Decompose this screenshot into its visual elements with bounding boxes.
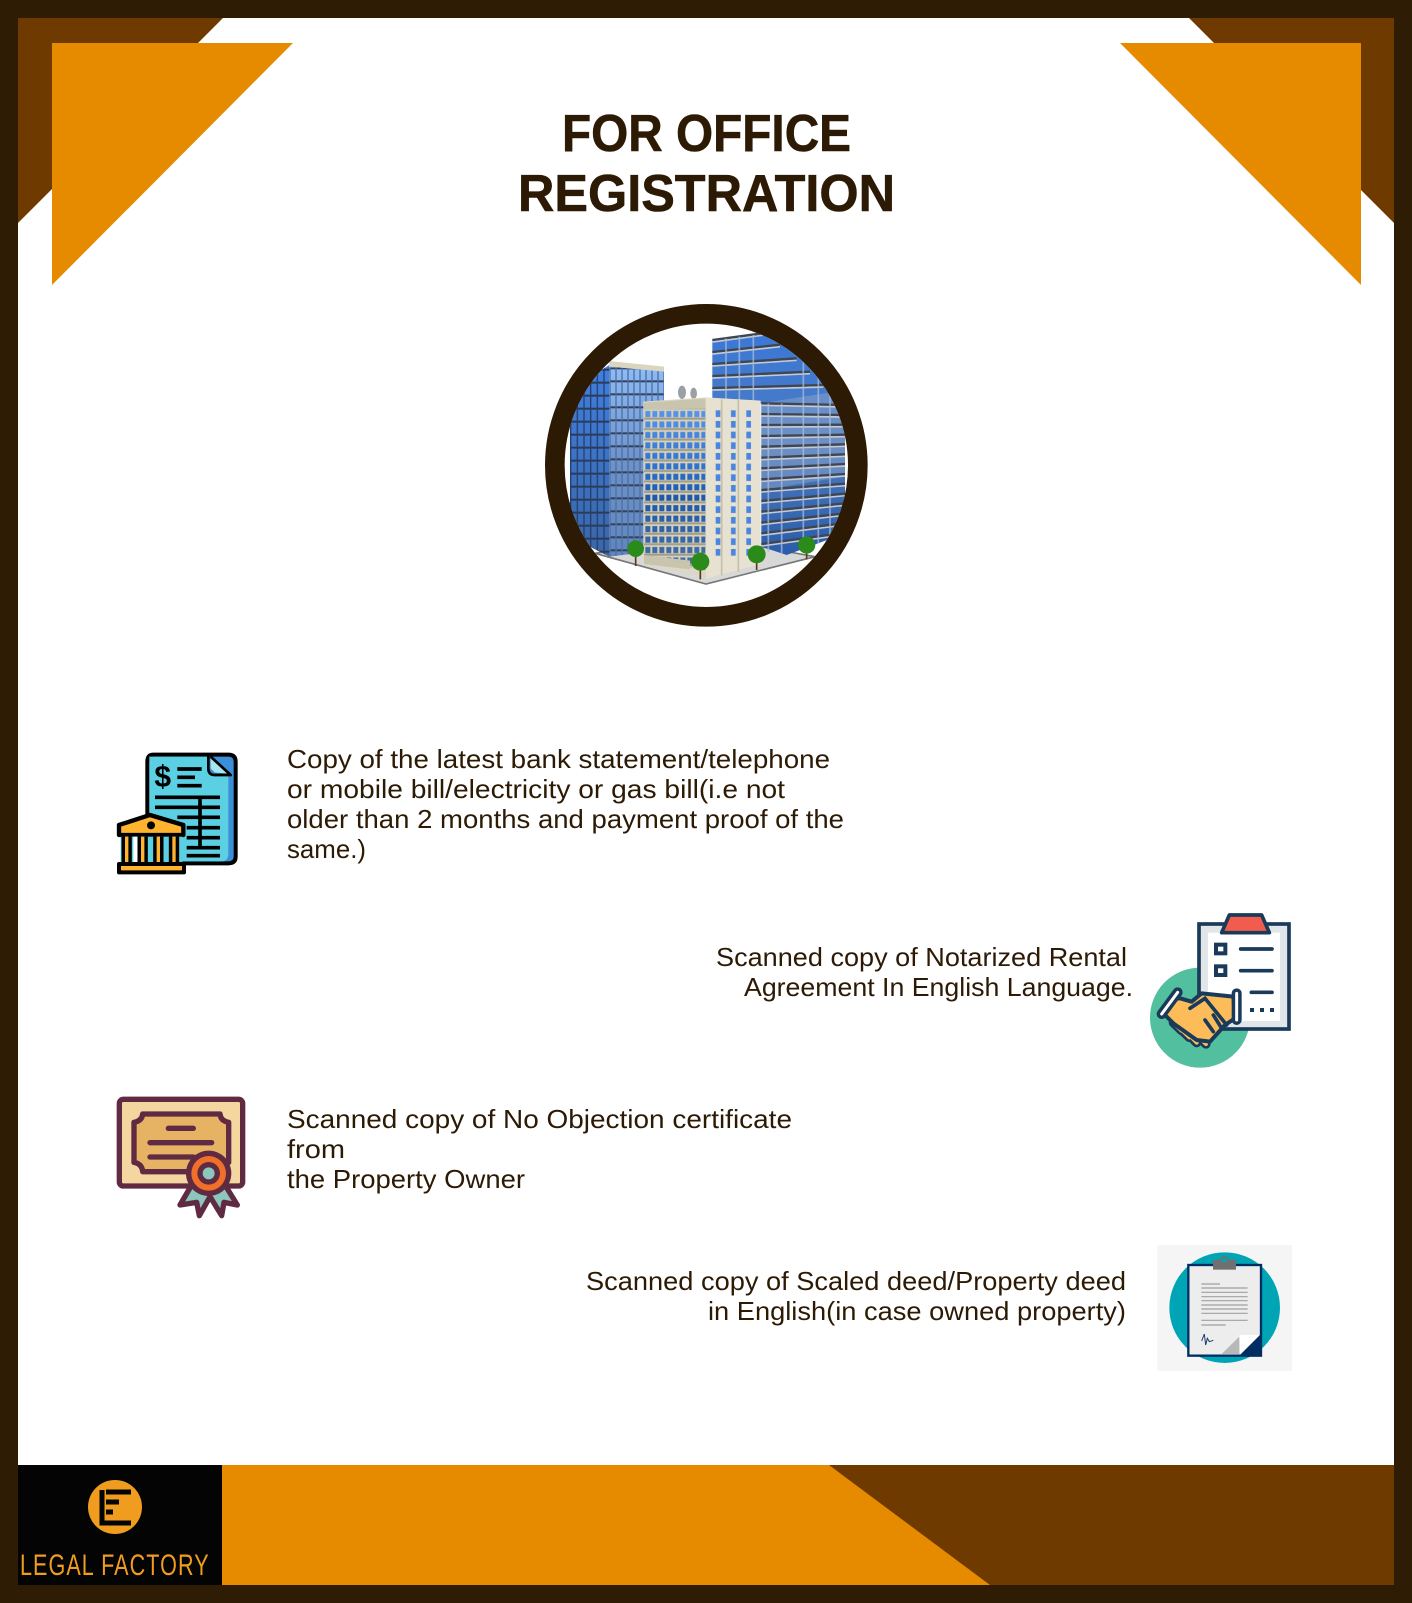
icon: bank document: $	[154, 760, 171, 794]
text: bank statement: same.)	[287, 834, 366, 864]
office buildings badge	[555, 314, 858, 617]
text: no objection certificate: from	[287, 1134, 345, 1164]
title: REGISTRATION	[518, 165, 895, 223]
text: rental agreement: Scanned copy of Notarized Rental	[716, 942, 1127, 972]
text: no objection certificate: Scanned copy of No Objection certificate	[287, 1104, 792, 1134]
trees	[627, 536, 815, 579]
fingers	[1173, 1023, 1206, 1044]
icon: bank document	[119, 755, 236, 872]
item 1: bank statement	[119, 744, 844, 872]
item 4: property deed	[586, 1245, 1292, 1371]
text: rental agreement: Agreement In English Language.	[744, 972, 1133, 1002]
text: rental agreement	[716, 942, 1133, 1002]
icon: handshake checklist	[1150, 915, 1289, 1068]
text: bank statement	[287, 744, 844, 864]
text: no objection certificate	[287, 1104, 792, 1194]
text: no objection certificate: the Property Owner	[287, 1164, 525, 1194]
text: property deed: Scanned copy of Scaled deed/Property deed	[586, 1266, 1126, 1296]
text: bank statement: or mobile bill/electricity or gas bill(i.e not	[287, 774, 786, 804]
center building	[643, 397, 706, 577]
left tower	[570, 365, 609, 557]
back right tower	[712, 333, 845, 555]
item 2: rental agreement	[716, 915, 1289, 1068]
top-left corner decoration	[18, 18, 293, 285]
icon: logo E	[88, 1480, 142, 1534]
logo wordmark: LEGAL FACTORY	[20, 1547, 209, 1582]
text: bank statement: older than 2 months and payment proof of the	[287, 804, 844, 834]
item 3: no objection certificate	[119, 1099, 792, 1216]
text: bank statement: Copy of the latest bank statement/telephone	[287, 744, 830, 774]
dishes	[678, 386, 686, 399]
icon: signed clipboard	[1157, 1245, 1292, 1371]
badge ring	[555, 314, 858, 617]
title	[518, 105, 895, 223]
icon: office towers	[570, 333, 846, 585]
text: property deed	[586, 1266, 1126, 1326]
title: FOR OFFICE	[562, 105, 851, 163]
top-right corner decoration	[1120, 18, 1394, 285]
logo: Legal Factory	[18, 1465, 222, 1585]
footer band	[222, 1465, 1394, 1585]
icon: certificate	[119, 1099, 243, 1216]
text: property deed: in English(in case owned property)	[708, 1296, 1126, 1326]
